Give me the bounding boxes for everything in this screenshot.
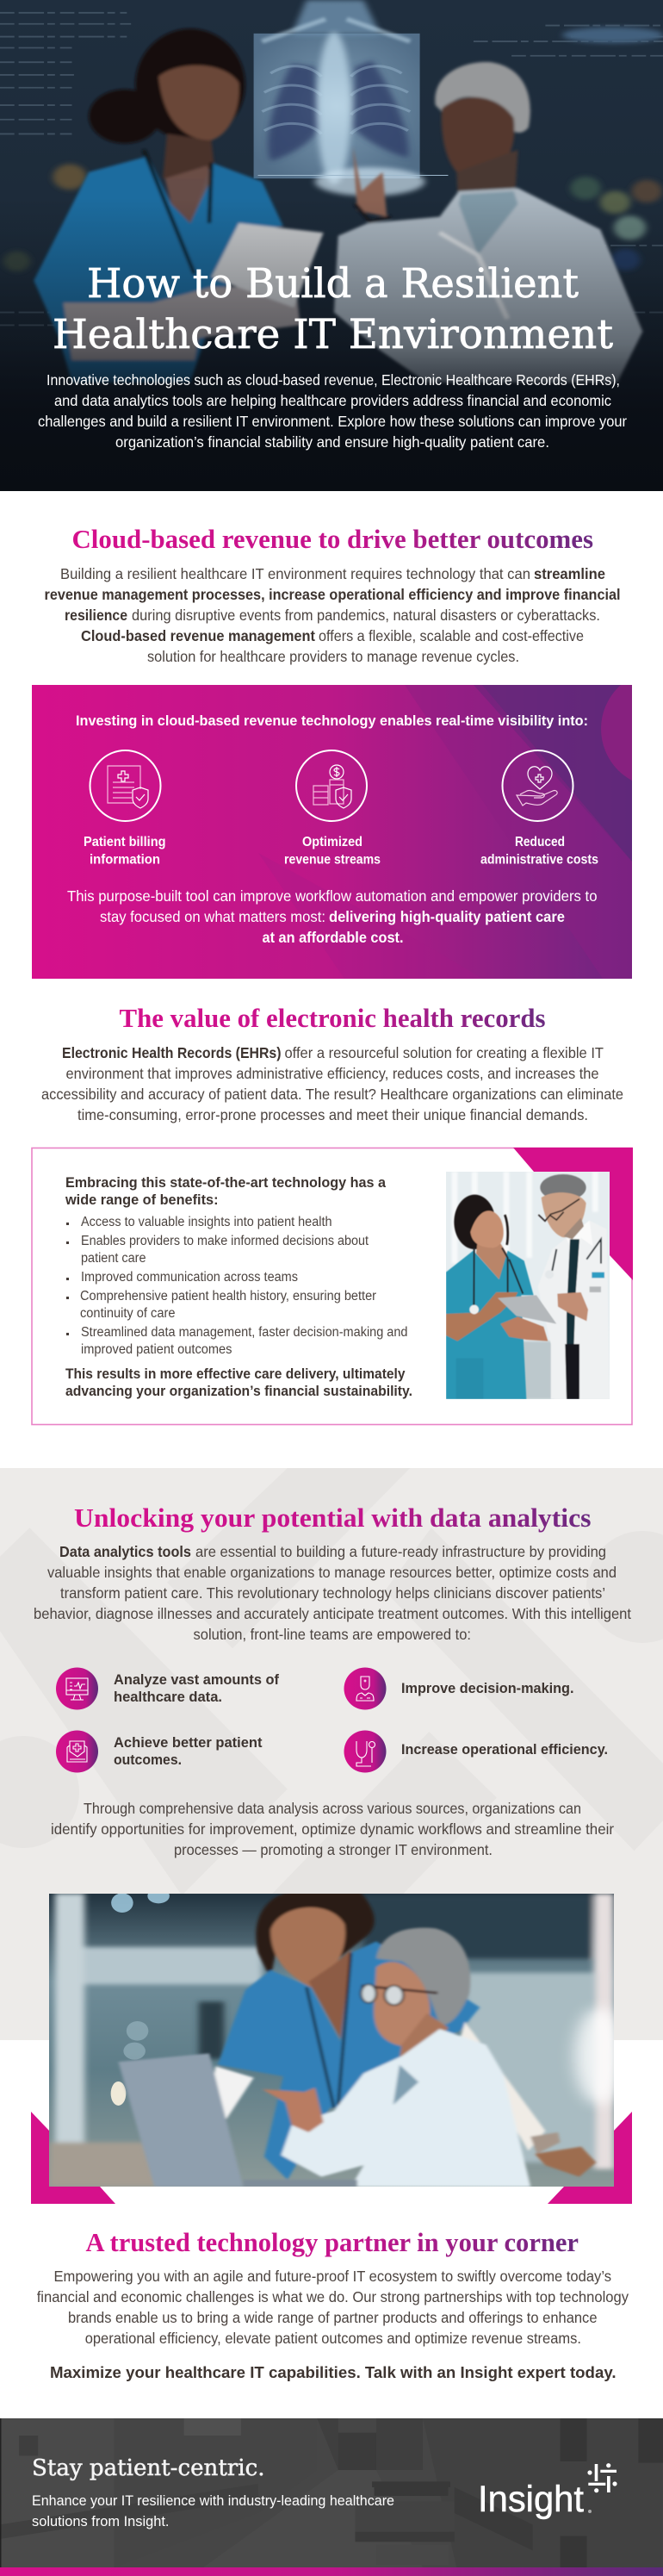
section text: cloud-based revenue: [45, 565, 620, 665]
panel closing text: [67, 887, 598, 946]
footer text: Enhance your IT resilience with industry-leading healthcare: [32, 2493, 394, 2509]
benefits conclusion: This results in more effective care delivery, ultimately: [65, 1366, 406, 1382]
benefits heading: wide range of benefits:: [65, 1192, 219, 1208]
benefits list: Access to valuable insights into patient health: [81, 1215, 332, 1229]
icon: heart in hand: [503, 750, 573, 821]
hero banner: [0, 0, 663, 491]
item: achieve better patient outcomes: outcomes.: [114, 1752, 182, 1768]
footer gradient bar: [0, 2567, 663, 2576]
footer background: hospital corridor: [0, 2418, 663, 2567]
section text: electronic health records: accessibility and accuracy of patient data. The result? Healthcare organizations can eliminate: [41, 1086, 623, 1103]
icon labels: Reduced: [515, 835, 565, 849]
intro text: and data analytics tools are helping healthcare providers address financial and economic: [54, 392, 611, 409]
section closing text: data analytics: processes — promoting a stronger IT environment.: [174, 1841, 493, 1858]
icon: revenue stream coins: [296, 750, 367, 821]
footer text: solutions from Insight.: [32, 2514, 169, 2529]
benefits list: improved patient outcomes: [81, 1342, 232, 1357]
section text: cloud-based revenue: Building a resilient healthcare IT environment requires technology that can: [60, 565, 530, 582]
section text: electronic health records: time-consuming, error-prone processes and meet their unique financial demands.: [77, 1106, 588, 1123]
item: increase operational efficiency: Increase operational efficiency.: [401, 1742, 608, 1758]
icon labels: Patient billing: [84, 835, 165, 849]
doctor figure: [376, 1928, 470, 2025]
icon labels: [84, 835, 598, 867]
panel: cloud revenue benefits: [32, 670, 663, 979]
section text: data analytics: are essential to building a future-ready infrastructure by providing: [195, 1543, 606, 1560]
section text: cloud-based revenue: solution for healthcare providers to manage revenue cycles.: [147, 648, 519, 665]
section text: electronic health records: Electronic Health Records (EHRs): [62, 1044, 281, 1061]
section text: cloud-based revenue: Cloud-based revenue management: [81, 627, 315, 644]
section closing text: data analytics: Through comprehensive data analysis across various sources, organizations can: [84, 1800, 581, 1817]
section text: data analytics: Data analytics tools: [59, 1543, 191, 1560]
section heading: electronic health records: The value of electronic health records: [119, 1003, 546, 1033]
section heading: trusted partner: A trusted technology partner in your corner: [86, 2227, 579, 2257]
item: achieve better patient outcomes: Achieve better patient: [114, 1735, 263, 1751]
doctor: [334, 62, 642, 383]
panel closing text: at an affordable cost.: [262, 929, 403, 946]
section text: cloud-based revenue: revenue management processes, increase operational efficiency and improve financial: [45, 586, 620, 603]
intro text: [38, 371, 627, 451]
photo corner accents: [31, 2112, 632, 2204]
panel closing text: This purpose-built tool can improve workflow automation and empower providers to: [67, 887, 598, 905]
section text: data analytics: [34, 1543, 631, 1643]
doctor: [538, 1221, 610, 1399]
intro text: challenges and build a resilient IT environment. Explore how these solutions can improve your: [38, 413, 627, 430]
call to action: Maximize your healthcare IT capabilities. Talk with an Insight expert today.: [50, 2363, 617, 2381]
section heading: data analytics: Unlocking your potential with data analytics: [74, 1503, 591, 1533]
benefits conclusion: advancing your organization’s financial sustainability.: [65, 1384, 412, 1399]
section text: electronic health records: offer a resourceful solution for creating a flexible IT: [284, 1044, 604, 1061]
item: analyze healthcare data: healthcare data.: [114, 1689, 222, 1705]
section closing text: data analytics: [51, 1800, 614, 1858]
section text: trusted partner: financial and economic challenges is what we do. Our strong partnerships with top technology: [37, 2288, 629, 2305]
panel heading: Investing in cloud-based revenue technology enables real-time visibility into:: [76, 712, 588, 729]
item: analyze healthcare data: Analyze vast amounts of: [114, 1672, 279, 1688]
benefits list: Improved communication across teams: [81, 1270, 298, 1285]
section heading: cloud-based revenue: Cloud-based revenue to drive better outcomes: [72, 524, 593, 554]
section text: data analytics: behavior, diagnose illnesses and accurately anticipate treatment outcomes. With this intelligent: [34, 1605, 631, 1622]
logo: Insight: [478, 2463, 617, 2520]
x-ray: [254, 0, 448, 196]
section text: trusted partner: Empowering you with an agile and future-proof IT ecosystem to swiftly overcome today’s: [53, 2268, 611, 2285]
photo: nurse and doctor at laptop: [49, 1888, 626, 2187]
section text: cloud-based revenue: resilience: [65, 607, 127, 624]
section text: electronic health records: [41, 1044, 623, 1123]
benefits list: Comprehensive patient health history, ensuring better: [80, 1289, 376, 1304]
section text: data analytics: solution, front-line teams are empowered to:: [193, 1626, 471, 1643]
item: increase operational efficiency: [344, 1730, 608, 1773]
panel closing text: delivering high-quality patient care: [329, 908, 565, 925]
nurse: [454, 1195, 495, 1249]
icon labels: Optimized: [302, 835, 362, 849]
footer text: [32, 2493, 394, 2529]
item: analyze healthcare data: [56, 1668, 279, 1709]
panel: data analytics background: [0, 1468, 663, 2040]
benefits list: patient care: [81, 1251, 146, 1266]
icon: patient billing document: [90, 750, 160, 821]
section text: cloud-based revenue: streamline: [534, 565, 605, 582]
panel: EHR benefits: [32, 1148, 633, 1425]
laptop: [118, 2053, 243, 2187]
section text: trusted partner: [37, 2268, 629, 2347]
benefits list: Streamlined data management, faster decision-making and: [81, 1325, 408, 1340]
item: improve decision-making: [344, 1668, 573, 1709]
hero photo: clinicians viewing chest x-ray: [0, 0, 663, 491]
item: improve decision-making: Improve decision-making.: [401, 1681, 573, 1696]
item: achieve better patient outcomes: [56, 1730, 263, 1773]
intro text: organization’s financial stability and ensure high-quality patient care.: [115, 433, 549, 451]
photo: nurse and doctor with tablet: [446, 1172, 610, 1399]
footer heading: Stay patient-centric.: [32, 2455, 265, 2481]
section text: cloud-based revenue: during disruptive events from pandemics, natural disasters or cyberattacks.: [132, 607, 600, 624]
title: [53, 260, 613, 358]
benefits list: Enables providers to make informed decisions about: [81, 1234, 369, 1248]
section text: data analytics: valuable insights that enable organizations to manage resources better, optimize costs and: [47, 1564, 617, 1581]
icon labels: administrative costs: [480, 853, 598, 867]
icon labels: revenue streams: [284, 853, 381, 867]
intro text: Innovative technologies such as cloud-based revenue, Electronic Healthcare Records (EHRs),: [46, 371, 620, 389]
title: How to Build a Resilient: [87, 260, 579, 308]
icon labels: information: [90, 853, 160, 867]
section closing text: data analytics: identify opportunities for improvement, optimize dynamic workflows and streamline their: [51, 1820, 614, 1838]
section text: data analytics: transform patient care. This revolutionary technology helps clinicians discover patients’: [60, 1584, 605, 1602]
footer banner: [0, 2418, 663, 2576]
title: Healthcare IT Environment: [53, 311, 613, 358]
section text: cloud-based revenue: offers a flexible, scalable and cost-effective: [319, 627, 584, 644]
section text: trusted partner: operational efficiency, elevate patient outcomes and optimize revenue streams.: [85, 2330, 581, 2347]
benefits heading: [65, 1175, 387, 1208]
section text: trusted partner: brands enable us to bring a wide range of partner products and offerings to enhance: [68, 2309, 598, 2326]
logo: Insight: Insight: [478, 2479, 584, 2520]
benefits list: continuity of care: [80, 1306, 176, 1321]
benefits list: [66, 1215, 408, 1357]
section text: electronic health records: environment that improves administrative efficiency, reduces costs, and increases the: [65, 1065, 599, 1082]
nurse: [34, 28, 324, 383]
benefits conclusion: [65, 1366, 412, 1399]
benefits heading: Embracing this state-of-the-art technology has a: [65, 1175, 387, 1191]
panel closing text: stay focused on what matters most:: [100, 908, 325, 925]
nurse figure: [256, 1891, 375, 1979]
